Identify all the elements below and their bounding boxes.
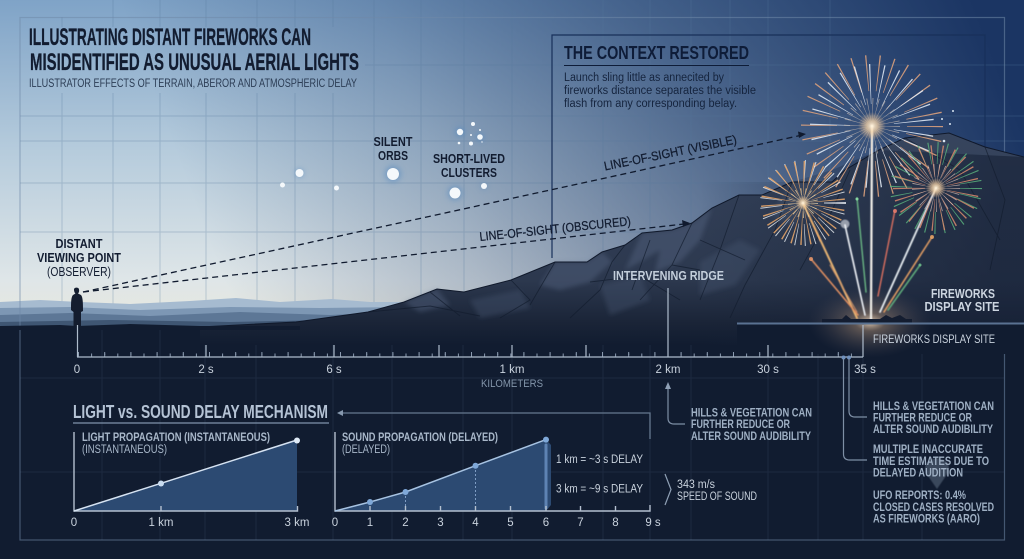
callout: multiple inaccurate estimates: MULTIPLE INACCURATE [873, 444, 983, 456]
axis labels: 0 [74, 364, 80, 376]
chart: sound propagation: 6 [543, 517, 549, 529]
panel: the context restored frame [552, 35, 985, 258]
note: ufo reports: UFO REPORTS: 0.4% [873, 490, 966, 502]
title [29, 24, 359, 76]
foreground below site [737, 324, 1024, 354]
label: line of sight obscured: LINE-OF-SIGHT (OBSCURED) [479, 214, 631, 244]
observer label: (OBSERVER) [47, 265, 111, 279]
arrow: heading connector [337, 410, 650, 439]
silent orbs label: ORBS [378, 149, 408, 163]
chart: sound propagation: 8 [612, 517, 619, 529]
right burst [901, 153, 971, 223]
main burst [819, 73, 925, 179]
callout: hills and vegetation centre: HILLS & VEGETATION CAN [691, 408, 812, 420]
callout: hills and vegetation centre: ALTER SOUND AUDIBILITY [691, 431, 811, 443]
label: fireworks display site scene [924, 287, 1000, 314]
note: ufo reports: AS FIREWORKS (AARO) [873, 514, 980, 526]
callout: multiple inaccurate estimates: TIME ESTIMATES DUE TO [873, 456, 989, 468]
chart: light propagation: (INSTANTANEOUS) [82, 444, 167, 456]
axis labels [74, 364, 876, 390]
panel body text: flash from any corresponding belay. [564, 98, 737, 110]
observer label: DISTANT [56, 237, 103, 251]
chart: sound propagation: 7 [577, 517, 584, 529]
label: intervening ridge: INTERVENING RIDGE [613, 269, 724, 283]
short-lived clusters label: SHORT-LIVED [433, 152, 505, 166]
callout: hills and vegetation right: ALTER SOUND AUDIBILITY [873, 424, 993, 436]
sky background [0, 0, 1024, 330]
axis labels: 2 km [656, 364, 680, 376]
chart: sound propagation: 2 [402, 517, 409, 529]
chart: light propagation: 0 [71, 517, 77, 529]
observer label: VIEWING POINT [37, 251, 121, 265]
chart: sound propagation: 5 [507, 517, 514, 529]
silent orbs label: SILENT [374, 135, 413, 149]
chart: sound propagation: 3 [437, 517, 444, 529]
title: ILLUSTRATING DISTANT FIREWORKS CAN [29, 24, 311, 51]
delay labels [556, 454, 643, 496]
distance timeline axis [74, 288, 876, 390]
axis labels: 2 s [198, 364, 214, 376]
display site ground glow [808, 286, 932, 358]
callout: hills and vegetation right: HILLS & VEGETATION CAN [873, 401, 994, 413]
silent orbs label [374, 135, 413, 163]
chart: sound propagation: SOUND PROPAGATION (DELAYED) [342, 432, 498, 444]
chart: sound propagation: 0 [332, 517, 338, 529]
callout: hills and vegetation centre [665, 382, 812, 443]
callout: hills and vegetation right: FURTHER REDUCE OR [873, 412, 973, 424]
title: MISIDENTIFIED AS UNUSUAL AERIAL LIGHTS [30, 49, 359, 76]
note: ufo reports [873, 490, 994, 526]
panel body text [564, 72, 756, 110]
heading: light vs sound: LIGHT vs. SOUND DELAY MECHANISM [73, 402, 328, 422]
axis labels: 30 s [757, 364, 779, 376]
arrow: line of sight obscured [83, 220, 690, 292]
panel body text: fireworks distance separates the visible [564, 85, 756, 97]
short-lived clusters label: CLUSTERS [441, 166, 497, 180]
ground line [737, 322, 1024, 324]
label: fireworks display site axis: FIREWORKS DISPLAY SITE [873, 334, 995, 346]
arrow: line of sight visible [83, 132, 806, 292]
sparks [809, 110, 954, 266]
speed of sound note [665, 474, 757, 505]
short-lived clusters label [433, 152, 505, 180]
chart: sound propagation: 1 [367, 517, 373, 529]
axis labels: 6 s [326, 364, 342, 376]
sky grid [20, 0, 1024, 326]
label: line of sight visible: LINE-OF-SIGHT (VISIBLE) [603, 133, 738, 173]
launch site silhouettes [822, 315, 912, 323]
chart: light propagation: 3 km [285, 517, 309, 529]
left burst [771, 171, 835, 235]
chart: light propagation: 1 km [149, 517, 173, 529]
lower dark band [0, 326, 1024, 559]
speed of sound note: 343 m/s [677, 479, 715, 491]
speed of sound note: SPEED OF SOUND [677, 491, 757, 503]
axis labels: 35 s [854, 364, 876, 376]
distant hazy hills [0, 298, 420, 326]
icon: observer silhouette [71, 288, 83, 326]
axis labels: 1 km [500, 364, 524, 376]
callout: multiple inaccurate estimates [844, 359, 989, 480]
delay labels: 3 km = ~9 s DELAY [556, 484, 643, 496]
label: fireworks display site scene: FIREWORKS [931, 287, 995, 301]
chart: light propagation: LIGHT PROPAGATION (INSTANTANEOUS) [82, 432, 270, 444]
rising rocket trails [803, 126, 936, 320]
panel heading: the context restored: THE CONTEXT RESTORED [564, 42, 749, 63]
panel body text: Launch sling little as annecited by [564, 72, 724, 84]
foreground ground [0, 324, 300, 330]
lights in the sky [280, 122, 487, 200]
callout: hills and vegetation centre: FURTHER REDUCE OR [691, 419, 791, 431]
callout: multiple inaccurate estimates: DELAYED AUDITION [873, 468, 963, 480]
chart: sound propagation: 4 [472, 517, 479, 529]
chart: sound propagation: 9 s [645, 517, 661, 529]
axis labels: KILOMETERS [481, 378, 543, 390]
lower grid [20, 326, 1004, 540]
icon: location marker [925, 458, 949, 489]
delay labels: 1 km = ~3 s DELAY [556, 454, 643, 466]
label: fireworks display site scene: DISPLAY SITE [924, 300, 1000, 314]
chart: light propagation [71, 432, 309, 529]
callout: hills and vegetation right [849, 359, 994, 436]
chart: sound propagation [332, 432, 661, 529]
intervening ridge [200, 133, 1024, 345]
observer label [37, 237, 121, 279]
subtitle: ILLUSTRATOR EFFECTS OF TERRAIN, ABEROR AND ATMOSPHERIC DELAY [29, 78, 357, 90]
fireworks display [771, 73, 971, 323]
chart: sound propagation: (DELAYED) [342, 444, 390, 456]
